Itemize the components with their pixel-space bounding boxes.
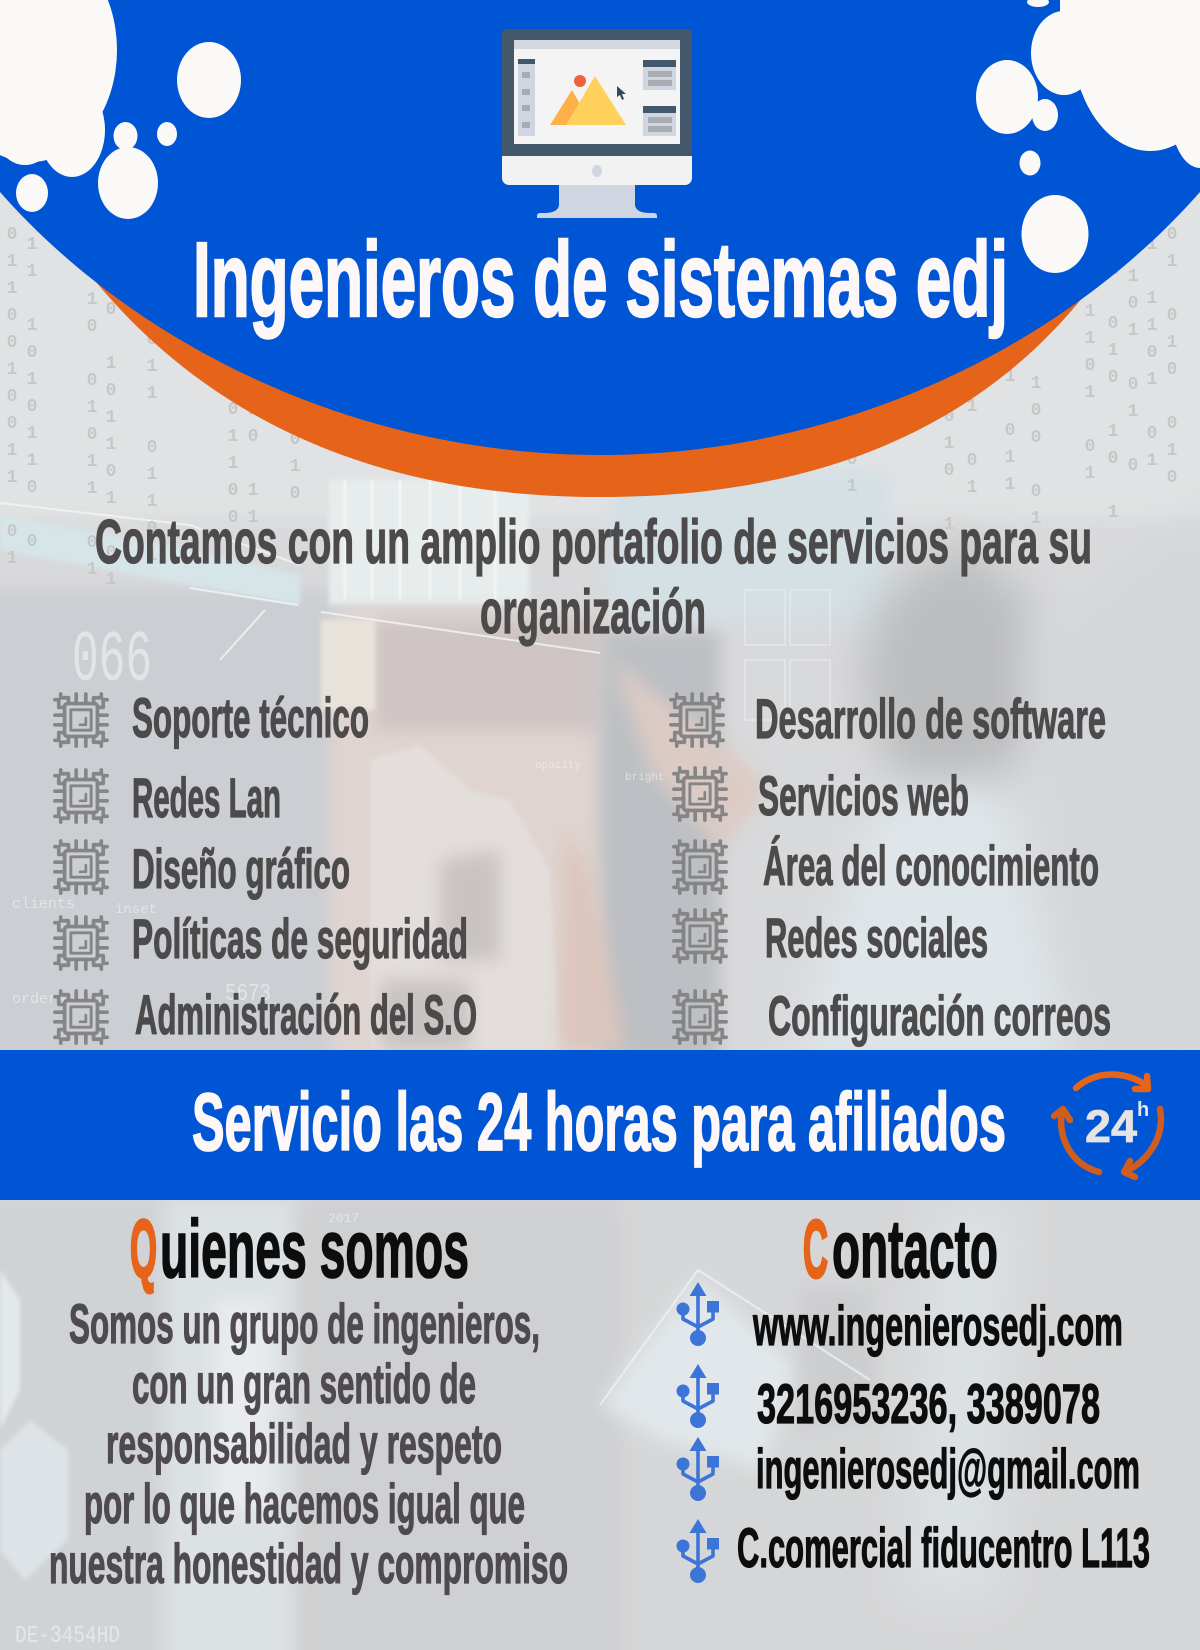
description paragraph: Somos un grupo de ingenieros, — [69, 1292, 540, 1355]
service: Servicios web: Servicios web — [758, 764, 969, 827]
background: binary code columns: 1 1101 01 — [1142, 235, 1162, 478]
background: binary code columns: 1 100 01 — [1026, 320, 1046, 536]
background: interface labels: bright — [625, 772, 665, 784]
services list: right column — [671, 687, 1111, 1047]
background: binary code columns: 1 010 10 1 — [1103, 260, 1123, 530]
background: binary code columns — [2, 225, 1182, 597]
service: Configuración correos — [674, 984, 1111, 1047]
background: binary code columns: 01100 — [223, 400, 243, 535]
background: binary code columns: 0110010011 01 — [2, 225, 22, 576]
service: Políticas de seguridad: Políticas de seguridad — [132, 907, 468, 970]
icon: 24 hours: h — [1137, 1099, 1149, 1121]
service: Soporte técnico — [55, 686, 369, 749]
blue band — [0, 1050, 1200, 1200]
description paragraph: nuestra honestidad y compromiso — [49, 1532, 568, 1595]
service: Diseño gráfico: Diseño gráfico — [132, 837, 350, 900]
services list: left column — [55, 686, 477, 1046]
background: binary code columns: 10 11 — [243, 400, 263, 535]
service: Redes Lan: Redes Lan — [132, 766, 281, 829]
icon: desktop monitor — [502, 29, 692, 218]
decorative white bubbles — [0, 0, 1200, 273]
background: interface labels: clients — [12, 896, 75, 913]
background: binary code columns: 01 01 — [962, 370, 982, 505]
background: binary code columns: 011 01101 — [142, 330, 162, 573]
background: interface labels: DE-3454HD — [15, 1623, 120, 1650]
background: interface labels: inset — [115, 902, 157, 918]
background: interface labels: opacity — [535, 760, 582, 772]
background: interface labels: 2017 — [328, 1211, 359, 1226]
background: binary code columns: 0 101101 01 — [101, 300, 121, 597]
icon: 24 hours: 24 — [1085, 1101, 1137, 1152]
service: Diseño gráfico — [55, 837, 350, 900]
heading: Contacto: ontacto — [832, 1204, 998, 1295]
service: Redes sociales: Redes sociales — [765, 906, 988, 969]
background: interface labels: 5673 — [225, 981, 271, 1008]
panel: contacto — [676, 1204, 1150, 1583]
background: binary code columns: 01 — [842, 450, 862, 504]
description paragraph: responsabilidad y respeto — [106, 1412, 502, 1475]
heading: Quienes somos: Q — [130, 1204, 157, 1295]
service: Administración del S.O: Administración del S.O — [135, 983, 477, 1046]
service: Área del conocimiento — [674, 834, 1099, 897]
heading: Contacto — [803, 1204, 998, 1295]
contact: website — [676, 1282, 1123, 1357]
heading: Quienes somos: uienes somos — [160, 1204, 469, 1295]
background: binary code columns: 01101 01 — [1080, 275, 1100, 491]
panel: quienes somos — [49, 1204, 568, 1595]
service: Administración del S.O — [55, 983, 477, 1046]
service: Soporte técnico: Soporte técnico — [132, 686, 369, 749]
orange crescent — [96, 282, 1083, 497]
service: Redes sociales — [674, 906, 988, 969]
service: Redes Lan — [55, 766, 281, 829]
background: binary code columns: 01 010 010 — [1162, 225, 1182, 495]
background: binary code columns: 01 011 0 — [1000, 340, 1020, 556]
background: interface labels: orders — [12, 991, 66, 1008]
intro heading: organización — [480, 578, 706, 647]
heading: Quienes somos — [130, 1204, 469, 1295]
heading: Contacto: C — [803, 1204, 828, 1295]
icon: 24 hours — [1054, 1074, 1161, 1177]
description paragraph: por lo que hacemos igual que — [84, 1472, 525, 1535]
background: binary code columns: 11 1010110 0 — [22, 235, 42, 559]
background: binary code columns: 1010 1 — [939, 380, 959, 542]
background: interface labels: 066 — [72, 620, 152, 702]
service: Políticas de seguridad — [55, 907, 468, 970]
description paragraph — [49, 1292, 568, 1595]
background: binary code columns: 10 01011 01 — [82, 290, 102, 587]
intro heading — [95, 508, 1092, 647]
blue header shape — [0, 0, 1200, 455]
contact: phone — [676, 1364, 1100, 1435]
background: binary code columns: 0101 01 0 — [1123, 240, 1143, 483]
background: interface labels — [12, 620, 665, 1650]
description paragraph: con un gran sentido de — [132, 1352, 476, 1415]
service: Servicios web — [674, 764, 969, 827]
service: Desarrollo de software — [671, 687, 1106, 750]
background: binary code columns: 010 — [285, 430, 305, 511]
